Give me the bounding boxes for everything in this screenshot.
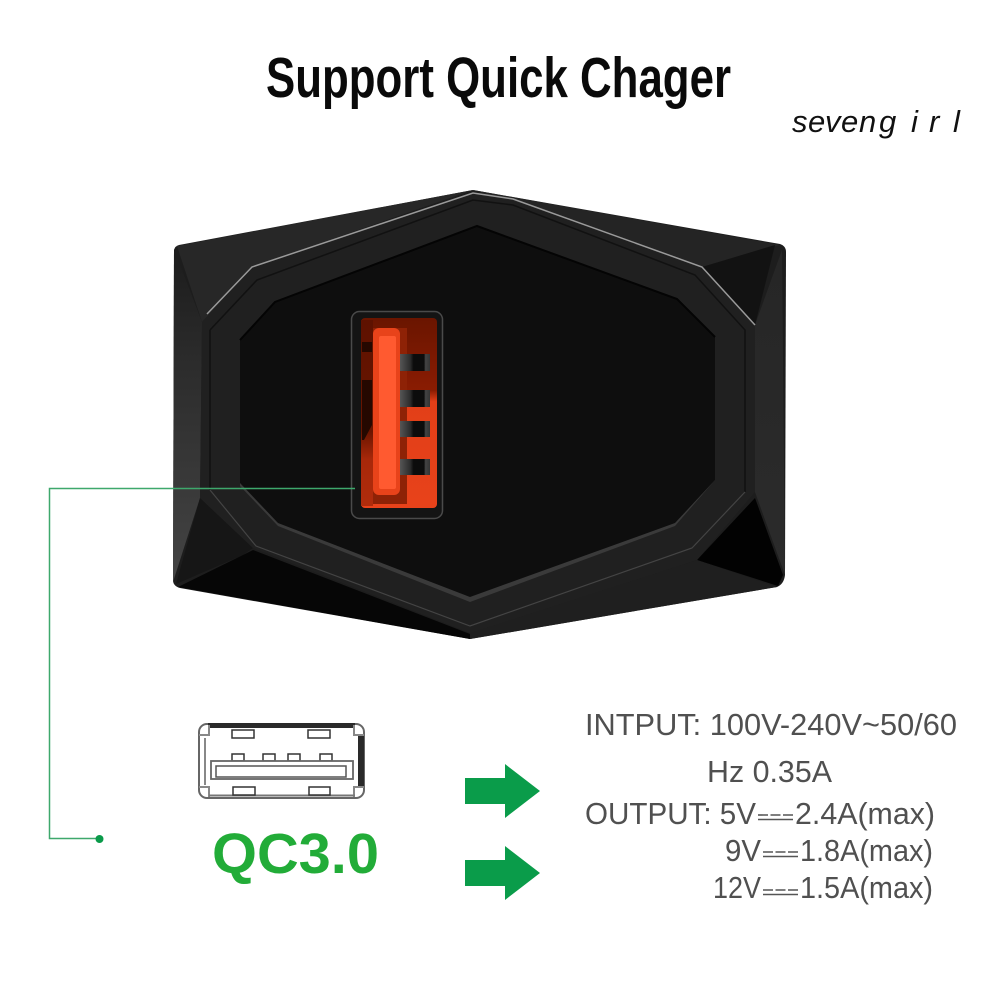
- tongue: [373, 328, 400, 495]
- specifications: [585, 707, 957, 905]
- output 12V: 12V: [713, 870, 761, 905]
- bottom left corner facet: [176, 498, 253, 584]
- connector shell: [199, 724, 364, 798]
- icon: usb connector: [199, 724, 364, 798]
- arrow: input: [465, 764, 540, 818]
- output 9V: 1.8A(max): [800, 833, 933, 868]
- bezel lower highlight: [210, 490, 745, 626]
- label: QC3.0: QC3.0: [212, 822, 379, 886]
- output 9V: [725, 833, 933, 868]
- right side facet: [755, 250, 785, 575]
- leader line: [50, 488, 355, 843]
- usb port: [352, 312, 442, 518]
- bezel ring: [200, 193, 755, 633]
- bezel highlight: [207, 193, 755, 325]
- left side facet: [173, 249, 202, 582]
- leader dot: [96, 835, 104, 843]
- output 5V: OUTPUT: 5V: [585, 796, 756, 831]
- output 12V: 1.5A(max): [800, 870, 933, 905]
- output 9V: 9V: [725, 833, 761, 868]
- tongue outline: [211, 761, 353, 779]
- output 12V: [713, 870, 933, 905]
- panel upper shadow edge: [240, 226, 715, 340]
- input line two: Hz 0.35A: [707, 754, 832, 789]
- tongue highlight: [379, 336, 396, 489]
- port interior: [361, 318, 437, 508]
- inner inset edge: [240, 227, 715, 602]
- left shadow band: [361, 320, 373, 506]
- inner panel: [240, 226, 715, 597]
- top right corner facet: [702, 245, 775, 325]
- charger body: [173, 190, 786, 639]
- outer shell: [173, 190, 786, 639]
- title: Support Quick Chager: [266, 46, 731, 110]
- output 5V: [585, 796, 935, 831]
- port frame: [352, 312, 442, 518]
- dark blotches: [362, 342, 372, 440]
- watermark: sevengirl: [792, 104, 961, 139]
- tongue shadow: [373, 328, 407, 504]
- top left facet: [177, 190, 473, 322]
- bottom right facet: [470, 560, 777, 639]
- arrow: output: [465, 846, 540, 900]
- spring tabs: [232, 730, 332, 795]
- input line: INTPUT: 100V-240V~50/60: [585, 707, 957, 742]
- contact pins: [400, 354, 430, 475]
- top right facet: [473, 190, 780, 267]
- bezel inner dark line: [210, 200, 745, 492]
- output 5V: 2.4A(max): [795, 796, 935, 831]
- bottom left facet: [178, 550, 470, 639]
- bottom right corner facet: [697, 498, 783, 586]
